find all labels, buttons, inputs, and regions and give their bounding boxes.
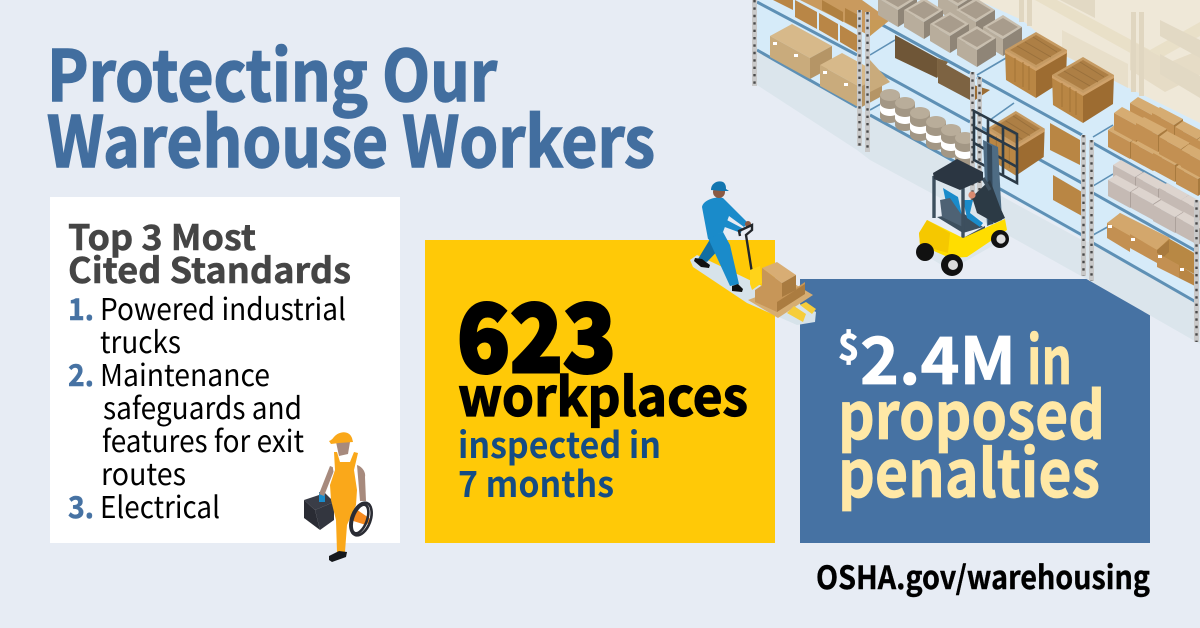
jack shadow: [690, 255, 816, 325]
numbered list: safeguards and: [103, 384, 302, 428]
panel: yellow statistic: [425, 240, 775, 543]
rear leg: [698, 236, 726, 262]
numbered list: trucks: [100, 318, 181, 362]
panel heading: Cited Standards: [68, 243, 351, 294]
fork frame: [974, 111, 1017, 183]
overalls: [330, 452, 358, 552]
torso: [702, 197, 748, 239]
stat detail: inspected in: [458, 417, 661, 469]
jack body: [750, 266, 762, 290]
cab floor: [937, 213, 983, 233]
head: [711, 181, 729, 198]
penalty text: proposed: [838, 364, 1105, 458]
dash: [972, 180, 1005, 223]
penalty amount: 2.4M: [860, 309, 1016, 403]
illustration: forklift: [916, 111, 1017, 276]
url: OSHA.gov/warehousing: [816, 553, 1150, 599]
tan cartons: [1108, 97, 1200, 196]
illustration: warehouse shelves: [752, 0, 1200, 344]
illustration: worker with pallet jack: [690, 181, 816, 325]
panel heading: Top 3 Most: [68, 210, 256, 261]
shelf interior: [757, 0, 1200, 304]
numbered list: routes: [101, 450, 186, 494]
dark cartons: [895, 35, 990, 100]
penalty text: in: [1027, 309, 1072, 403]
drums: [880, 89, 975, 166]
posts: [752, 0, 1199, 342]
grey crates: [878, 0, 1022, 67]
body: [919, 219, 1007, 258]
shirt: [331, 454, 364, 500]
jack handle: [739, 225, 752, 273]
numbered list: [68, 285, 346, 527]
mast: [983, 140, 1002, 226]
faded background shelving: [978, 0, 1200, 123]
grey cartons: [1108, 160, 1200, 245]
floor shadow: [757, 50, 1200, 344]
penalty text: penalties: [838, 422, 1100, 516]
boot: [329, 551, 347, 562]
driver: [943, 188, 963, 220]
panel: top 3 standards: [50, 197, 400, 543]
stat label: workplaces: [458, 356, 748, 432]
title: Protecting Our: [47, 21, 497, 122]
hands: [745, 221, 751, 227]
wooden crates: [987, 32, 1114, 216]
illustration: worker with toolbox: [304, 432, 376, 562]
parcels: [755, 262, 805, 312]
wheels: [916, 230, 1009, 276]
back leg: [350, 505, 372, 525]
arm right: [357, 465, 366, 501]
forklift shadow: [925, 224, 1015, 270]
penalty amount: $: [838, 319, 859, 371]
numbered list: Maintenance: [100, 351, 270, 395]
numbered list: 3.: [68, 483, 94, 527]
numbered list: Electrical: [100, 483, 220, 527]
penalty text: [838, 309, 1105, 516]
numbered list: 1.: [68, 285, 94, 329]
panel: blue statistic: [800, 279, 1150, 543]
pillars and roof: [934, 176, 990, 243]
seat: [940, 198, 963, 227]
arm left: [319, 466, 335, 496]
shelf beams: [757, 2, 1196, 302]
pallet: [748, 283, 813, 318]
arm: [722, 218, 742, 233]
stat detail: 7 months: [458, 456, 614, 508]
stat detail: [458, 417, 661, 508]
numbered list: features for exit: [102, 417, 304, 461]
front leg: [708, 232, 739, 286]
panel heading: [68, 210, 351, 294]
toolbox: [304, 492, 334, 530]
head: [329, 432, 353, 456]
numbered list: Powered industrial: [100, 285, 346, 329]
cable coil: [346, 500, 376, 538]
left bay cartons: [770, 0, 890, 108]
numbered list: 2.: [68, 351, 94, 395]
stat number: 623: [457, 264, 616, 400]
lower cartons: [1107, 213, 1196, 286]
title: [47, 21, 655, 188]
title: Warehouse Workers: [47, 87, 655, 188]
